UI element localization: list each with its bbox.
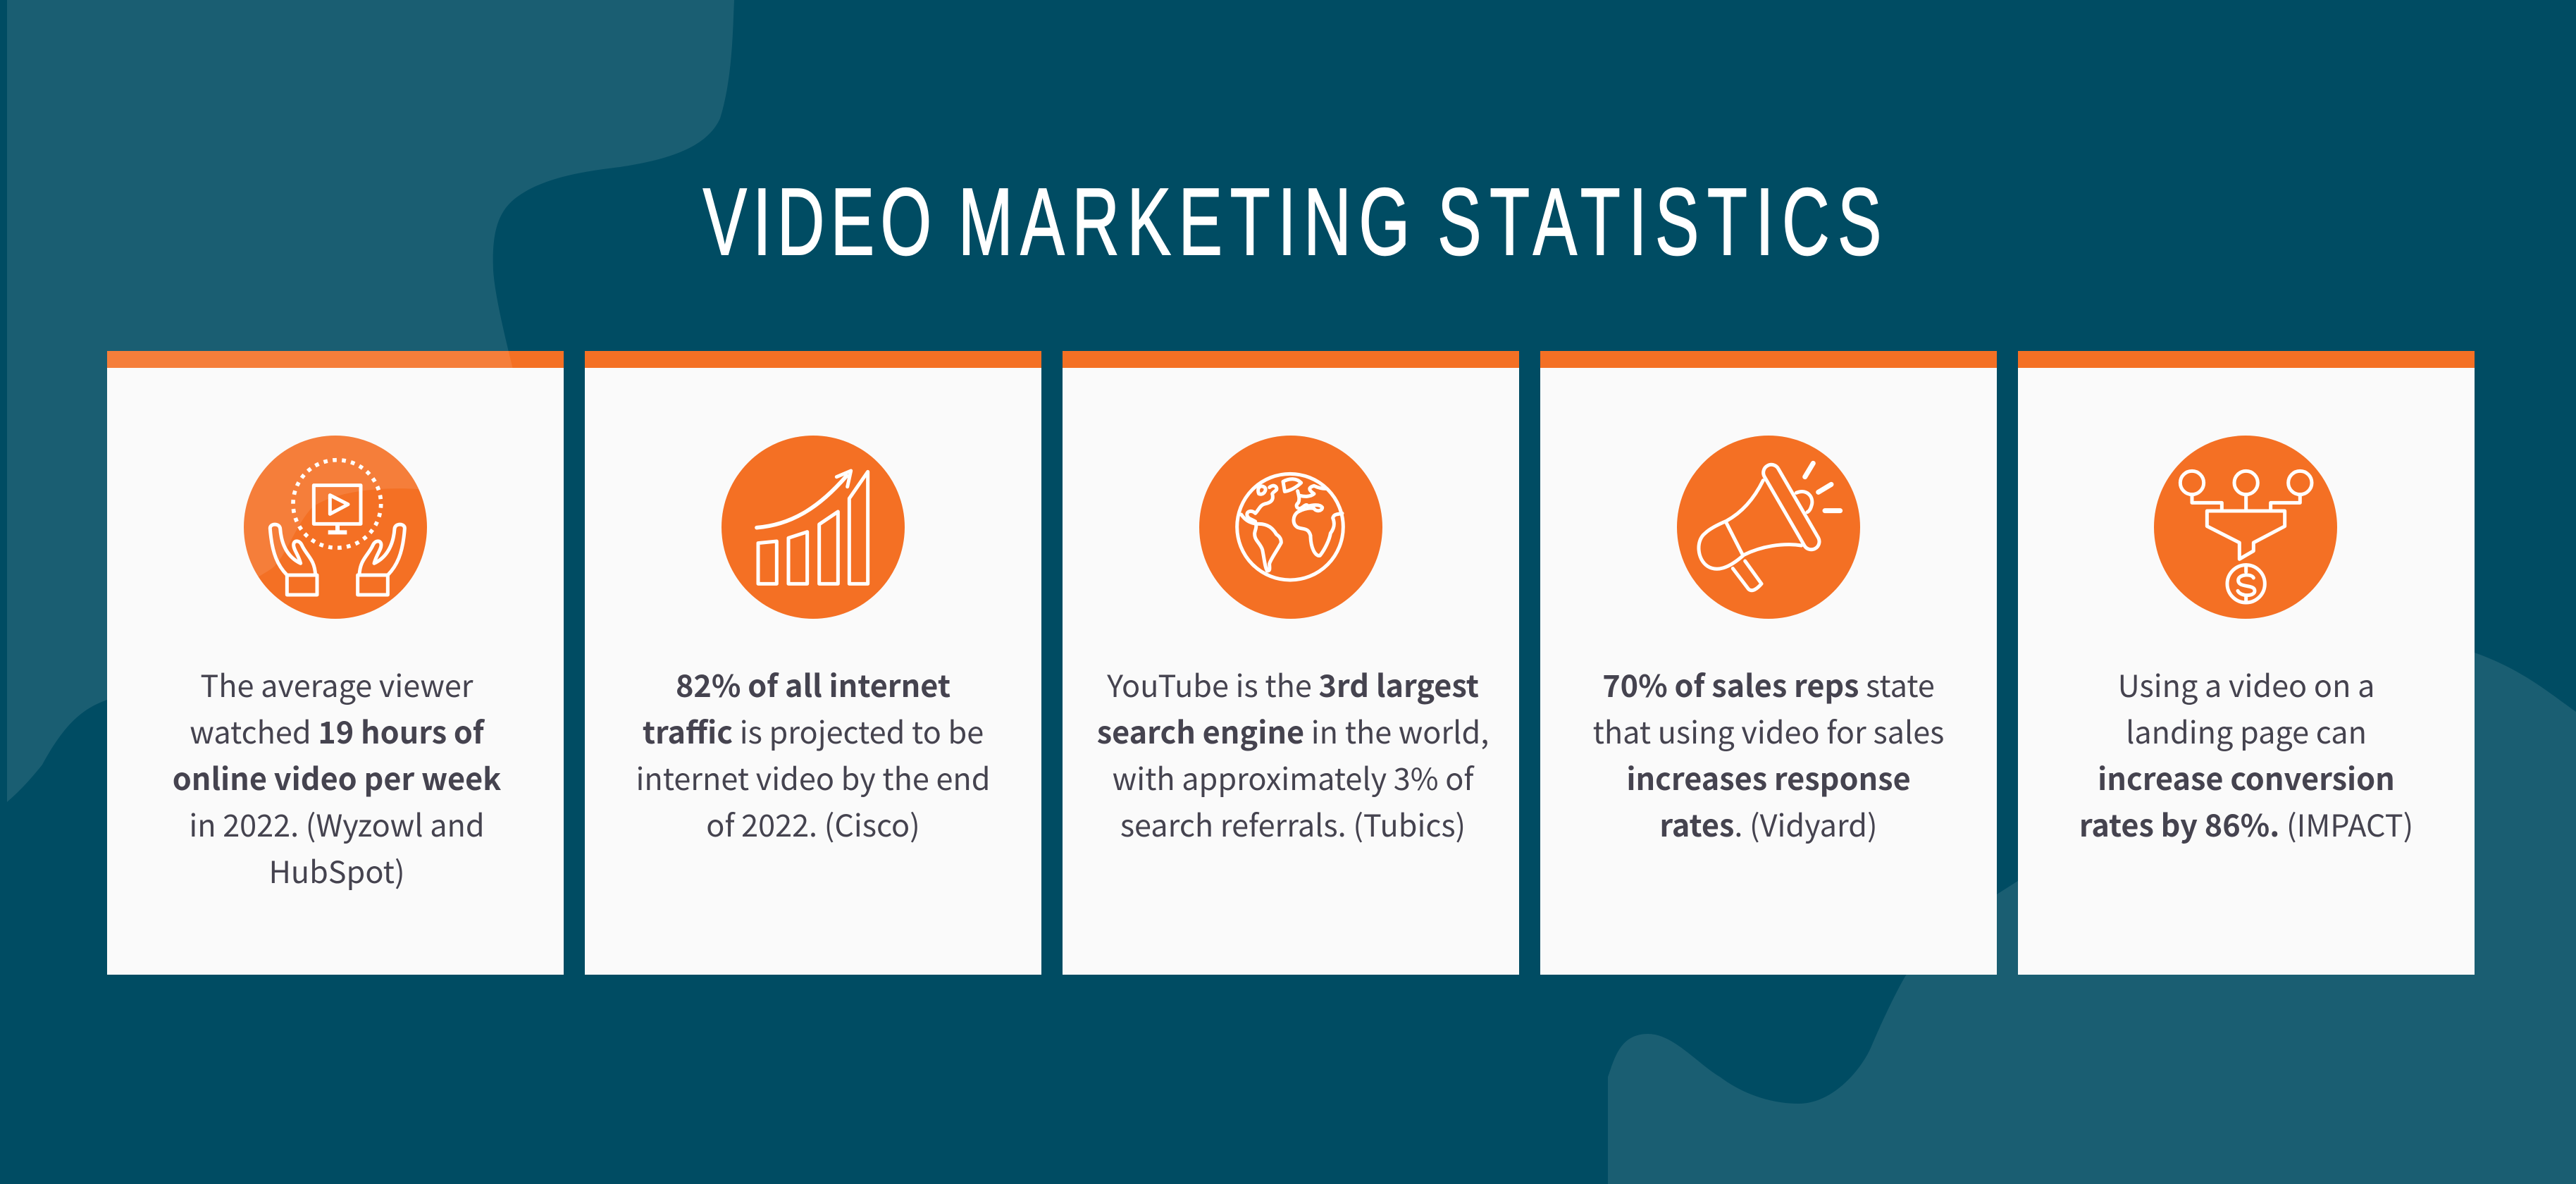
card 5 text: Using a video on a	[2118, 662, 2374, 706]
card 4 text	[1593, 662, 1944, 846]
card 2 text: traffic is projected to be	[643, 709, 984, 753]
card 2 text: of 2022. (Cisco)	[706, 802, 920, 846]
card 2 text: internet video by the end	[636, 756, 991, 799]
card 1 text: online video per week	[173, 756, 501, 799]
card 4 text: rates. (Vidyard)	[1659, 802, 1878, 846]
icon: globe	[1199, 436, 1382, 619]
panel: card 1	[107, 351, 564, 975]
card 2 text: 82% of all internet	[676, 662, 950, 706]
card 5 text	[2079, 662, 2413, 846]
card 1 background	[107, 351, 564, 975]
card 5 accent bar	[2018, 351, 2475, 368]
title: MARKETING	[958, 168, 1410, 275]
title	[703, 168, 1881, 275]
card 4 text: increases response	[1626, 756, 1911, 799]
background blob: bottom right	[1608, 653, 2576, 1184]
card 3 text: with approximately 3% of	[1113, 756, 1475, 799]
card 1 text	[173, 662, 501, 892]
card 3 text: search engine in the world,	[1097, 709, 1489, 753]
card 5 background	[2018, 351, 2475, 975]
card 4 accent bar	[1540, 351, 1997, 368]
icon: conversion funnel	[2154, 436, 2337, 619]
title: STATISTICS	[1437, 168, 1881, 275]
title: VIDEO	[703, 168, 931, 275]
icon: hands holding video screen	[244, 436, 427, 619]
card 1 text: in 2022. (Wyzowl and	[189, 802, 485, 846]
panel: card 2	[585, 351, 1041, 975]
card 2 accent bar	[585, 351, 1041, 368]
card 4 background	[1540, 351, 1997, 975]
card 2 text	[636, 662, 991, 846]
card 3 text: YouTube is the 3rd largest	[1106, 662, 1479, 706]
card 5 text: increase conversion	[2098, 756, 2395, 799]
background blob: top left	[7, 0, 734, 802]
card 4 text: that using video for sales	[1593, 709, 1944, 753]
card 2 background	[585, 351, 1041, 975]
card 1 text: HubSpot)	[268, 849, 405, 892]
card 1 accent bar	[107, 351, 564, 368]
icon: megaphone	[1677, 436, 1860, 619]
panel: card 3	[1063, 351, 1519, 975]
panel: card 4	[1540, 351, 1997, 975]
panel: card 5	[2018, 351, 2475, 975]
card 1 text: watched 19 hours of	[190, 709, 485, 753]
card 3 text: search referrals. (Tubics)	[1120, 802, 1466, 846]
card 4 text: 70% of sales reps state	[1602, 662, 1935, 706]
card 3 background	[1063, 351, 1519, 975]
card 5 text: landing page can	[2126, 709, 2367, 753]
card 3 accent bar	[1063, 351, 1519, 368]
card 3 text	[1097, 662, 1489, 846]
card 5 text: rates by 86%. (IMPACT)	[2079, 802, 2413, 846]
card 1 text: The average viewer	[200, 662, 473, 706]
icon: growth bar chart	[722, 436, 905, 619]
